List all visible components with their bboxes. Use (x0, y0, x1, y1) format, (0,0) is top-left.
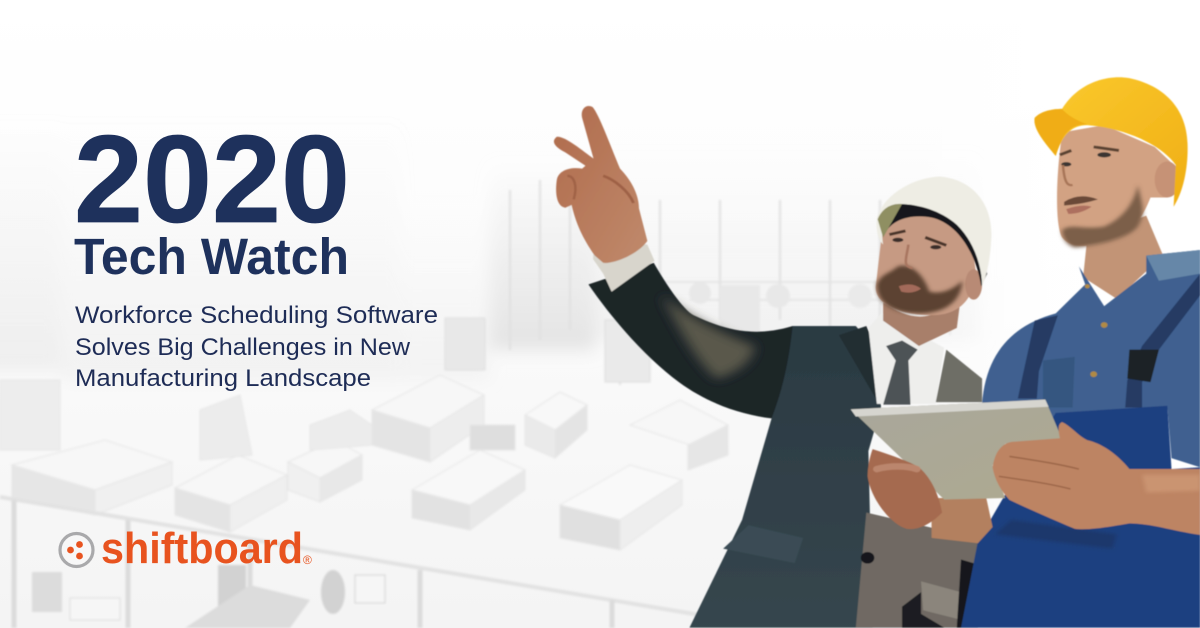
jacket lapel (839, 326, 877, 400)
manager hand under tablet (868, 449, 942, 529)
heading: Tech Watch: Tech Watch (74, 228, 349, 285)
pointing arm sleeve (588, 263, 793, 418)
subtitle: Workforce Scheduling Software (75, 302, 438, 329)
subtitle: Solves Big Challenges in New (75, 334, 411, 361)
necktie (883, 341, 918, 405)
grey jacket side (936, 350, 982, 402)
wordmark: shiftboard (101, 524, 303, 573)
jacket button (861, 552, 874, 564)
eyes and brows (889, 231, 946, 245)
person: manager in suit with white hard hat (554, 106, 991, 628)
face (1057, 125, 1178, 246)
eyes and brows (1060, 147, 1119, 155)
ear (1155, 161, 1180, 198)
racks at the back of the factory (0, 120, 980, 380)
forearm behind tablet (932, 498, 993, 543)
icon: shiftboard ring and dots (60, 534, 93, 566)
yellow hard hat (1034, 77, 1188, 207)
overalls bib and trousers (961, 406, 1200, 628)
neck and face (883, 295, 961, 346)
title: 2020: 2020 (74, 111, 350, 249)
white fade at the top right (900, 0, 1200, 628)
neck (1083, 216, 1163, 299)
suit lower right panel (856, 512, 986, 628)
tablet (851, 400, 1064, 499)
subtitle: Manufacturing Landscape (75, 365, 371, 392)
ear (965, 269, 982, 300)
overall straps (1018, 315, 1058, 398)
beard (877, 266, 962, 313)
shirt cuff (593, 237, 655, 292)
white hard hat (877, 177, 991, 286)
shirt buttons (1085, 284, 1108, 377)
white shirt (868, 313, 944, 404)
worker hand and forearm (993, 422, 1200, 535)
pointing hand (554, 106, 647, 263)
front railing and mesh fence (0, 497, 700, 628)
suit body (689, 326, 881, 628)
beard (1062, 185, 1143, 248)
logo: shiftboard (60, 524, 312, 573)
person: worker in denim with yellow hard hat (851, 77, 1200, 628)
registered mark: ® (303, 553, 312, 567)
denim shirt (982, 250, 1200, 467)
production pods (0, 375, 728, 550)
photo: two workers (554, 77, 1200, 628)
jacket pocket flap (723, 525, 803, 563)
